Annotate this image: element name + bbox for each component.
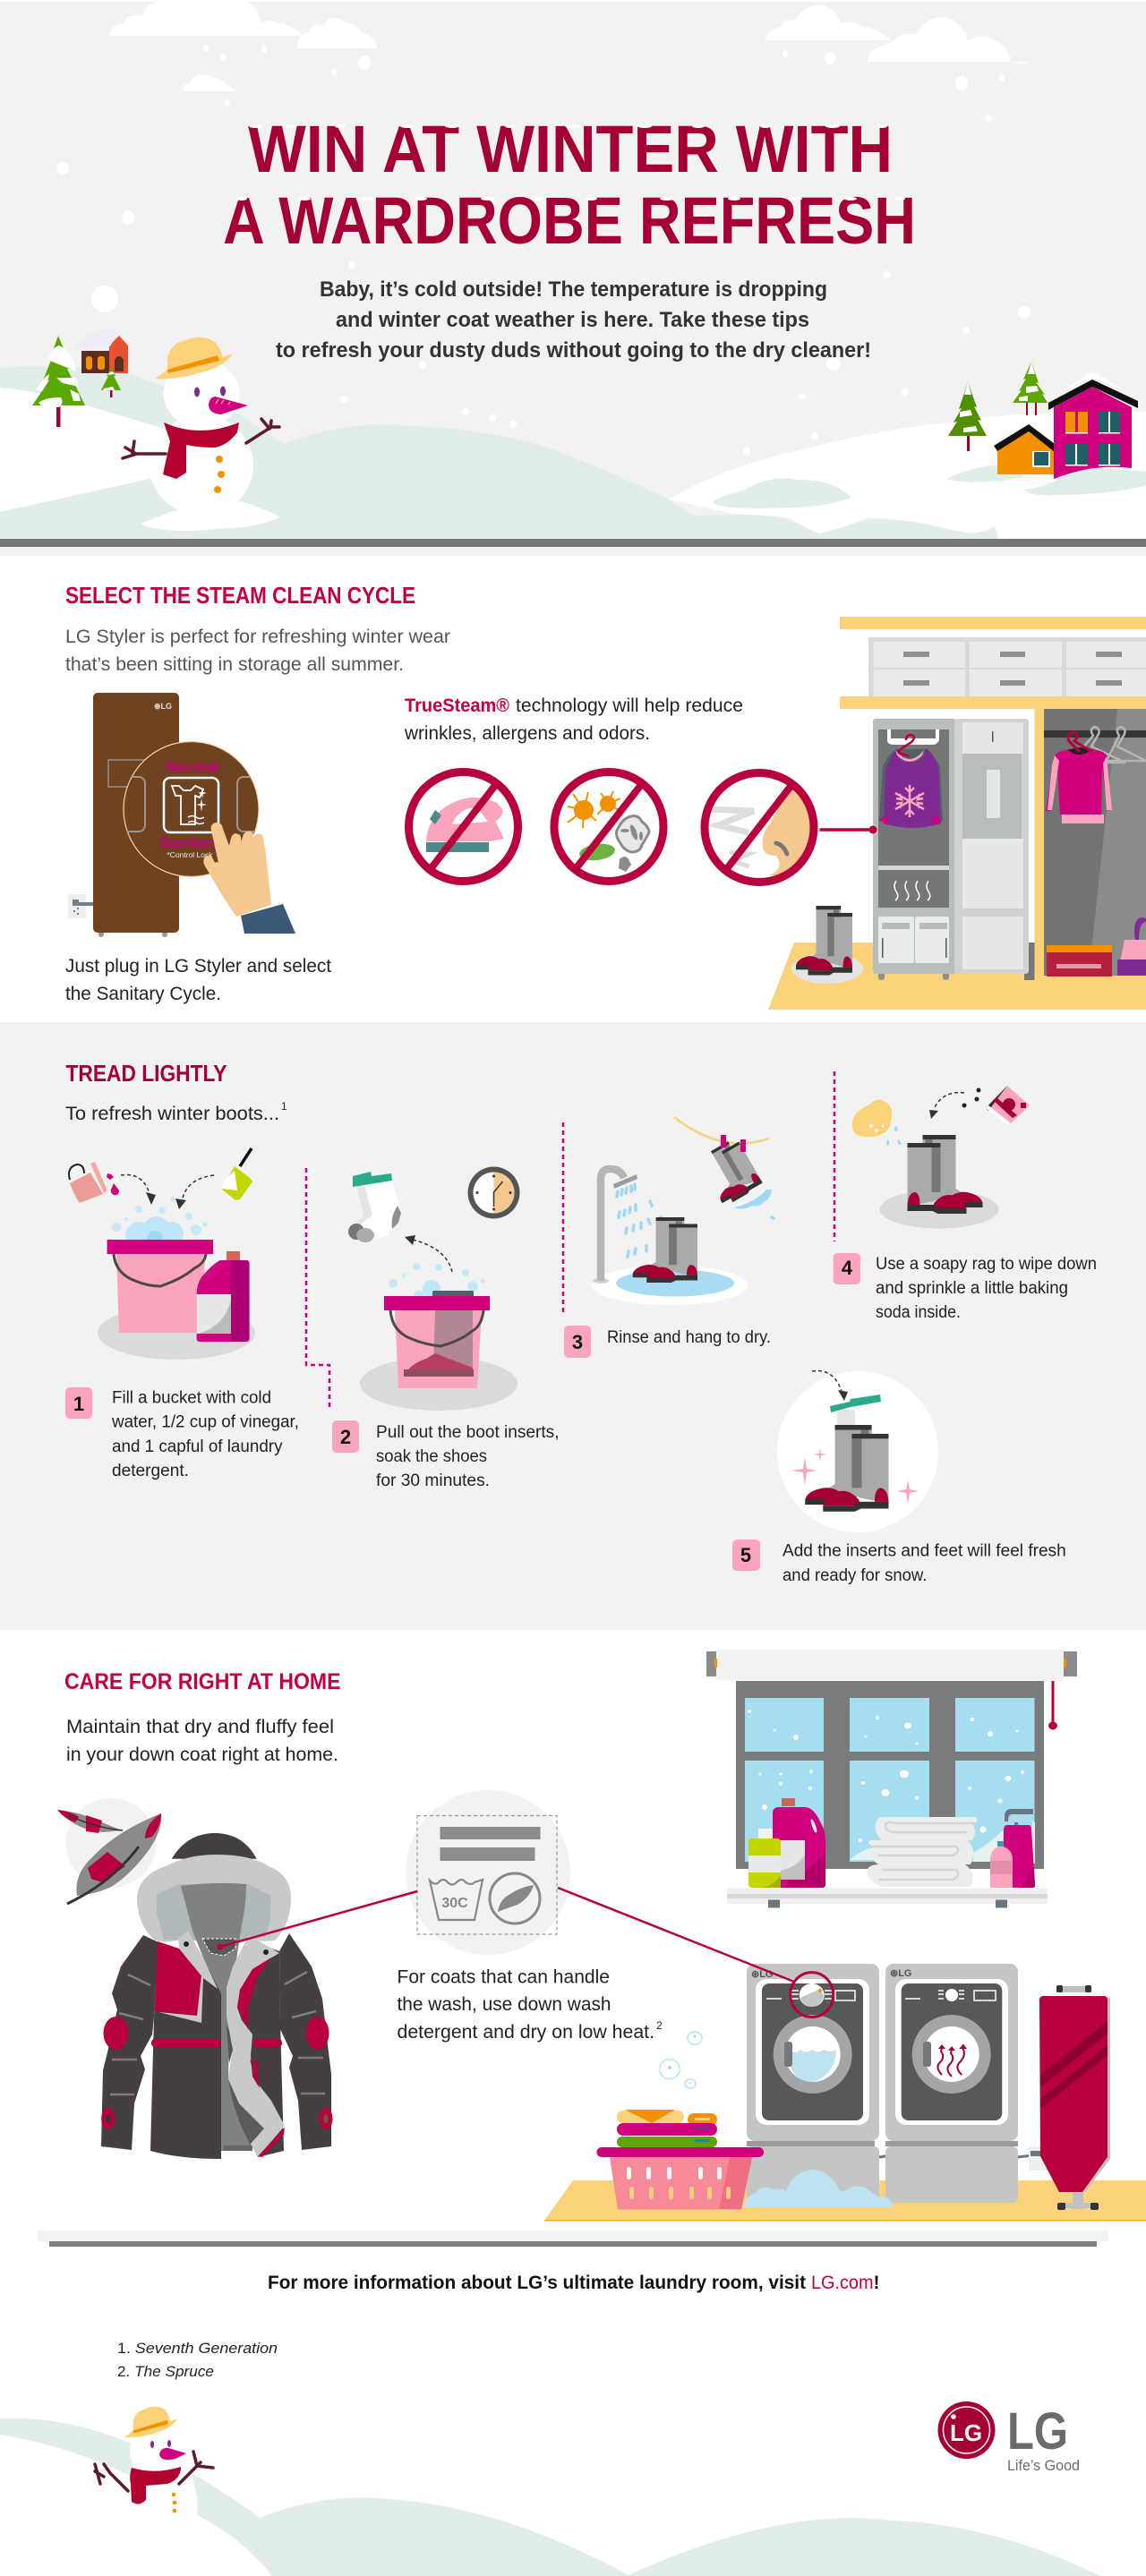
step 2 text: Pull out the boot inserts, [376,1423,559,1442]
step 1 text: Fill a bucket with cold [112,1389,271,1407]
icon: care label: 30C [441,1896,468,1911]
step 3 badge: 3 [572,1331,583,1353]
clock [467,1167,519,1219]
footer snowy hills [0,2418,1100,2576]
clouds [109,0,1029,91]
illustration: washer, dryer, basket and ironing board: ⊛LG [890,1968,911,1979]
illustration: LG Styler with control panel and hand: ⊛LG [154,702,172,711]
dashed dividers [306,1071,834,1409]
icon: no allergens and germs [554,772,663,881]
heading: care for right at home: CARE FOR RIGHT AT HOME [64,1669,340,1694]
illustration: LG Styler with control panel and hand: *Control Lock [167,850,213,859]
step 2 text: soak the shoes [376,1447,487,1466]
text: LG Styler intro [65,627,450,675]
snowflakes [56,45,1031,455]
step 1 text: water, 1/2 cup of vinegar, [111,1412,299,1432]
step 2 text: for 30 minutes. [376,1471,490,1490]
illustration: window with shelf and supplies [706,1650,1077,1908]
dryer [885,1964,1018,2141]
bottles [782,1798,795,1806]
cup pouring [70,1173,103,1203]
references: 1. Seventh Generation [117,2340,278,2357]
step 4 badge [834,1253,860,1284]
icon: snowman [123,337,280,531]
towels [867,1817,978,1887]
text: plug in LG Styler [65,956,331,1004]
title [223,112,916,258]
references: 2. The Spruce [117,2363,214,2380]
step 1 badge [65,1387,92,1419]
folded clothes [617,2111,684,2123]
text: TrueSteam technology [404,695,743,744]
intro text: and winter coat weather is here. Take these tips [336,308,809,332]
icon: left trees and cottage [32,329,128,427]
basket [610,2157,752,2209]
text: plug in LG Styler: Just plug in LG Styler and select [65,956,331,977]
logo: LG Life's Good: LG [1007,2402,1068,2461]
text: for coats that can handle the wash: For coats that can handle [398,1967,610,1987]
icon: right trees and houses [948,362,1138,479]
step 5 badge [732,1540,760,1571]
step 1 illustration: bucket with vinegar and detergent [69,1148,255,1360]
heading: select the steam clean cycle: SELECT THE STEAM CLEAN CYCLE [65,582,415,609]
step 2 badge [332,1420,359,1453]
illustration: LG Styler with control panel and hand: Sanitary [159,834,220,851]
step 4 illustration: sponge, baking soda and boots [852,1086,1030,1228]
step 3 badge [564,1326,591,1358]
intro text [276,277,871,363]
call to action: LG.com [811,2273,874,2293]
illustration: washer, dryer, basket and ironing board: ⊛LG [751,1969,774,1980]
purple garment on hanger [887,729,939,745]
icon: care label [406,1790,570,1955]
text: TrueSteam technology: technology will help reduce [516,695,743,716]
step 4 text: soda inside. [876,1303,961,1322]
illustration: parka coat [101,1833,333,2159]
text: LG Styler intro: that’s been sitting in storage all summer. [65,654,404,675]
text: to refresh winter boots: To refresh winter boots... [65,1104,279,1124]
step 4 text [876,1255,1097,1322]
illustration: LG Styler with control panel and hand: Normal [167,758,218,775]
step 1 text: detergent. [112,1462,189,1480]
power cord and outlet [879,2154,1039,2157]
step 5 text [783,1541,1066,1585]
styler body [878,971,885,980]
foam [743,2170,894,2207]
step 1 badge: 1 [73,1393,84,1415]
panel: tread lightly background [0,1022,1146,1630]
text: plug in LG Styler: the Sanitary Cycle. [65,984,221,1004]
step 4 text: and sprinkle a little baking [876,1279,1068,1298]
text: TrueSteam technology: wrinkles, allergens and odors. [404,723,650,744]
text: maintain dry and fluffy: in your down coat right at home. [66,1744,338,1765]
illustration: LG Styler with control panel and hand [68,693,295,937]
text: maintain dry and fluffy: Maintain that dry and fluffy feel [66,1717,334,1737]
text: for coats that can handle the wash: 2 [656,2019,663,2032]
step 1 text [111,1389,299,1480]
text: for coats that can handle the wash: detergent and dry on low heat. [398,2022,654,2043]
text: for coats that can handle the wash: the wash, use down wash [398,1994,611,2015]
pink sweater [1046,748,1111,815]
step 5 text: Add the inserts and feet will feel fresh [783,1541,1066,1561]
icon: feathers [57,1798,161,1904]
logo: LG Life's Good: Life’s Good [1007,2457,1080,2474]
panel: header winter scene [0,0,1146,556]
title: A WARDROBE REFRESH [223,183,916,258]
step 2 badge: 2 [340,1426,351,1448]
step 2 text [376,1423,559,1490]
step 1 text: and 1 capful of laundry [112,1437,283,1456]
step 4 text: Use a soapy rag to wipe down [876,1255,1097,1274]
arrow [413,1240,452,1272]
text: TrueSteam technology: TrueSteam® [405,695,509,716]
step 2 illustration: sock, clock and soaking boot [348,1167,519,1411]
arrows [121,1174,214,1202]
washer [747,1964,879,2141]
illustration: closet with LG Styler [768,617,1146,1010]
intro text: Baby, it’s cold outside! The temperature is dropping [320,277,827,302]
step 4 badge: 4 [842,1257,853,1279]
text: for coats that can handle the wash [398,1967,663,2043]
soaking bucket [360,1357,517,1411]
purse [1134,917,1146,940]
logo: LG Life's Good: LG [950,2419,982,2446]
sock [351,1182,374,1229]
text: LG Styler intro: LG Styler is perfect for refreshing winter wear [65,627,450,647]
shoe box [1047,945,1112,952]
step 3 text: Rinse and hang to dry. [607,1328,771,1347]
bubbles [660,2032,702,2088]
step 5 text: and ready for snow. [783,1566,927,1585]
heading: tread lightly: TREAD LIGHTLY [66,1060,227,1087]
connector [820,828,873,832]
step 3 illustration: shower and hanging boots [591,1117,775,1305]
connector lines from coat label to washer [217,1888,794,1982]
references [117,2340,278,2380]
call to action: ! [874,2273,879,2293]
intro text: to refresh your dusty duds without going to the dry cleaner! [276,338,871,363]
illustration: washer, dryer, basket and ironing board [544,1964,1146,2222]
text: to refresh winter boots: 1 [281,1100,287,1113]
icon: no wrinkles iron [408,772,517,881]
title: WIN AT WINTER WITH [248,112,893,186]
detergent sachet [221,1166,252,1200]
step 5 illustration: boots with inserts [777,1371,938,1532]
ironing board [1056,1986,1091,1992]
icon: footer snowman [95,2407,213,2518]
call to action: For more information about LG’s ultimate laundry room, visit [268,2273,806,2293]
snowy hills [0,366,1146,539]
boots by styler [791,953,863,984]
divider bar [38,2231,1108,2247]
logo: LG Life's Good [938,2401,1080,2474]
spray and pink bottle [1014,1822,1018,1833]
step 5 badge: 5 [740,1544,751,1566]
empty hangers [1070,727,1146,763]
icon: no odors nose [705,773,814,883]
text: maintain dry and fluffy [66,1717,338,1765]
